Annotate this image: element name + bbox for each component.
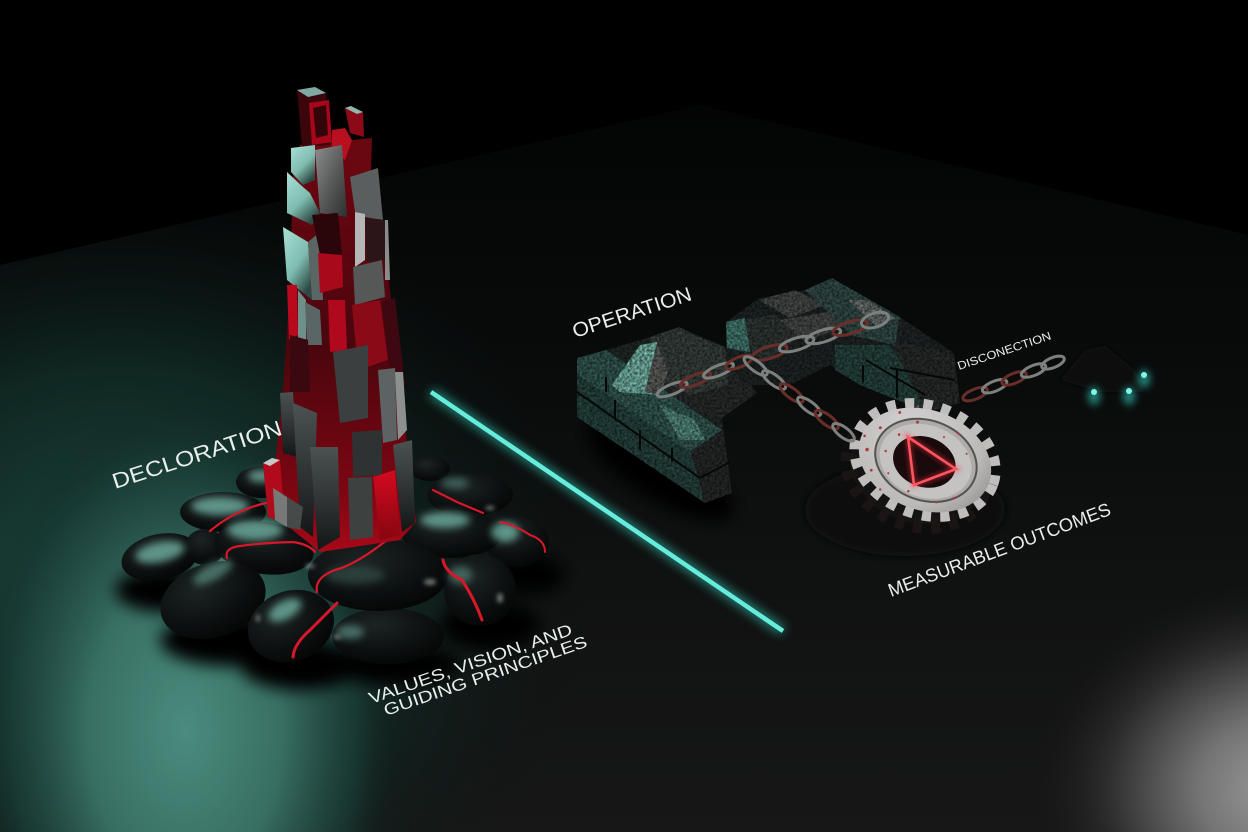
pebble: far right: [485, 517, 549, 567]
pebble: far left: [117, 526, 203, 588]
right wall front: [835, 345, 927, 412]
label: Disconection: DISCONECTION: [956, 330, 1053, 373]
gear face: [844, 390, 1006, 530]
pebble: right top: [427, 474, 513, 516]
wall shadow: [572, 400, 748, 540]
white strip: [355, 212, 365, 267]
pebble: back: [236, 466, 288, 498]
pebble highlights: [133, 470, 519, 639]
tumbled rock side: [645, 342, 668, 395]
wall end face: [690, 430, 732, 503]
dark block: [365, 218, 387, 262]
back low block: [665, 372, 757, 418]
neon divider line: [431, 392, 783, 631]
label: Operation: OPERATION: [570, 284, 694, 343]
pebble: left middle: [185, 529, 225, 565]
pebble: right lower: [444, 554, 516, 626]
brick top left: [726, 315, 800, 360]
gear depth: [832, 399, 1000, 545]
dark red block: [312, 213, 342, 255]
top stone 3: [805, 278, 900, 345]
pebble: middle left: [211, 515, 317, 581]
pebble: upper left: [180, 492, 266, 532]
wall front face: [577, 372, 705, 503]
top stone 1: [759, 290, 825, 318]
gear hole: [886, 427, 963, 496]
dust pile: [1060, 345, 1145, 392]
back rocks: [650, 327, 728, 395]
big teal block: [283, 227, 312, 300]
pebble speculars: [256, 506, 503, 639]
wall silhouette: [726, 278, 960, 412]
pebble: front: [332, 608, 444, 664]
wall top: [577, 350, 722, 452]
gravel pile under gear: [805, 464, 1005, 556]
right wall end: [889, 340, 960, 412]
top stone 2: [780, 312, 847, 342]
pebble: back right: [410, 457, 450, 481]
right grey block: [350, 168, 383, 220]
label: Values, vision, and guiding principles: VALUES, VISION, AND: [366, 621, 575, 708]
chain: to gear: [741, 354, 857, 444]
label: Decloration: DECLORATION: [109, 416, 285, 494]
broken brick wall: left: [572, 327, 757, 540]
teal middle block: [287, 172, 320, 225]
glowing triangle: [908, 437, 956, 485]
worn highlight: [848, 300, 895, 328]
obsidian tower: [263, 87, 416, 552]
label: Values, vision, and guiding principles: [366, 621, 590, 720]
tower core: [270, 140, 416, 552]
red block: [318, 253, 343, 293]
pebble: right middle: [402, 510, 502, 558]
chain: across walls: [655, 309, 890, 400]
gear inner ring: [869, 411, 982, 511]
teal side of left brick: [726, 318, 750, 352]
cog gear: [832, 386, 1009, 546]
label: Values, vision, and guiding principles: GUIDING PRINCIPLES: [381, 633, 590, 720]
grey upper block: [315, 145, 347, 217]
teal upper block: [291, 145, 315, 185]
upper red columns: [287, 285, 405, 390]
chain: disconnected: [961, 354, 1066, 404]
grey side strip: [308, 232, 323, 300]
pebble: centre: [308, 539, 448, 611]
broken brick wall: right: [726, 278, 960, 412]
wall top worn patch: [660, 405, 705, 440]
silver strip: [385, 220, 390, 280]
brick gaps: [577, 377, 730, 478]
pebble shadows: [115, 555, 565, 690]
glowing dots: [1088, 370, 1150, 405]
pebble base: [115, 457, 565, 690]
red cracks: [210, 490, 545, 657]
label: Measurable outcomes: MEASURABLE OUTCOMES: [885, 498, 1113, 601]
pebble: big left: [150, 548, 276, 652]
gear teeth: [841, 387, 1009, 533]
gear groove: [863, 405, 988, 516]
grey lower block: [353, 260, 385, 305]
lower blocks: [263, 302, 415, 550]
red speckles: [848, 391, 981, 516]
tumbled rock: [612, 342, 668, 395]
pebble: front left: [238, 578, 344, 674]
top red shard: [297, 87, 372, 175]
floor plane: [0, 211, 1248, 832]
wall silhouette: [577, 327, 757, 503]
